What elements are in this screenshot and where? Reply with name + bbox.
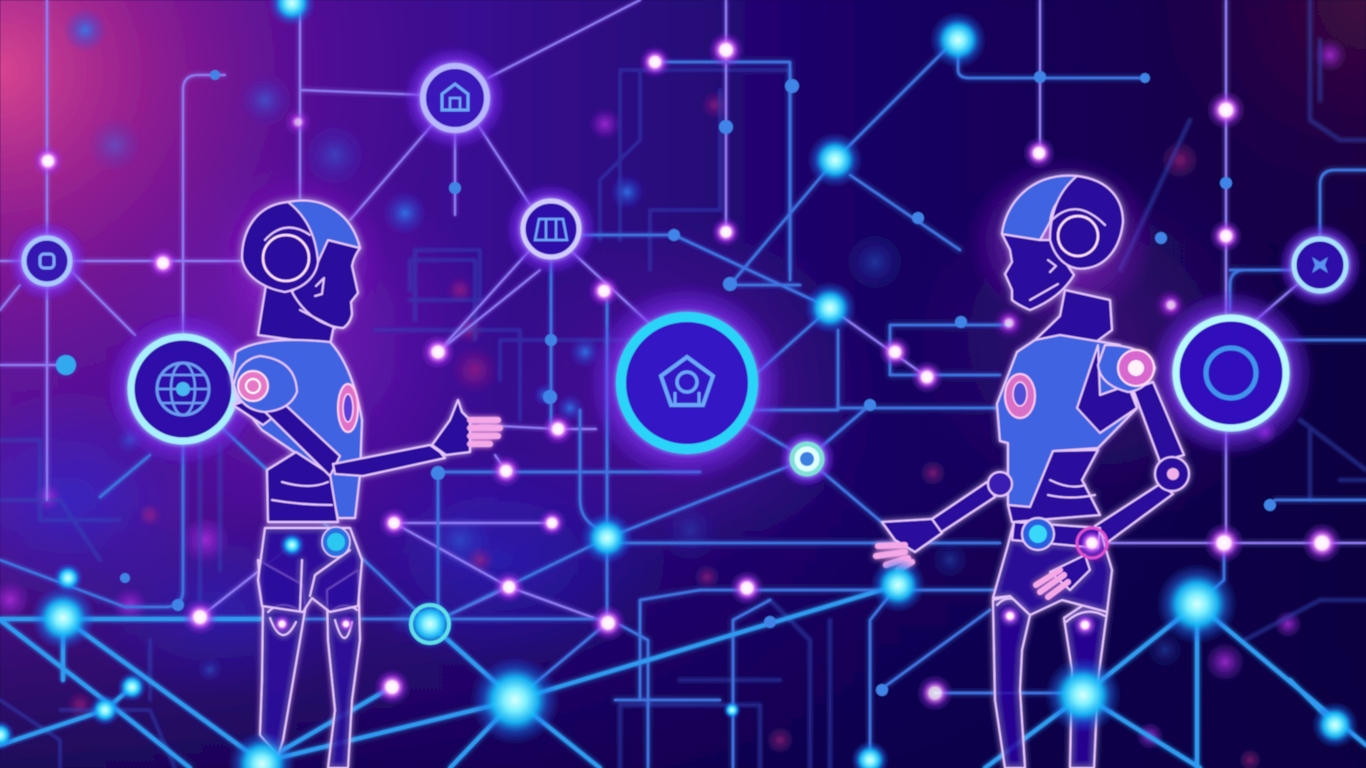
right robot head: [1002, 176, 1123, 310]
ring node: shield icon: [505, 183, 597, 275]
right robot torso: [997, 335, 1137, 522]
ring node: centre pentagon icon: [587, 283, 787, 483]
right robot: [876, 155, 1189, 768]
small blue junction dots: [120, 70, 1276, 696]
ring node: left small: [7, 221, 87, 301]
left robot legs: [258, 560, 360, 768]
right robot neck: [1033, 290, 1112, 350]
right robot back arm: [1095, 345, 1189, 542]
ring node: right small: [1278, 223, 1362, 307]
left robot arm: [234, 356, 445, 476]
left robot torso: [232, 340, 362, 522]
left robot hips and belt: [258, 527, 362, 633]
right robot legs: [993, 596, 1107, 768]
robot aura: [215, 175, 385, 345]
right robot wrist node and lower hand: [1036, 528, 1107, 597]
ring node: right large circle: [1147, 289, 1315, 457]
ring node: small cyan white: [779, 431, 835, 487]
left robot neck: [258, 280, 335, 345]
ring node: globe icon: [105, 311, 261, 467]
left robot hand: [432, 400, 500, 455]
left robot: [215, 175, 500, 768]
left robot head: [242, 201, 360, 328]
robot aura: [967, 155, 1157, 325]
thick cyan traces: [0, 585, 1366, 768]
right robot front arm: [876, 472, 1012, 570]
right robot hips: [993, 522, 1112, 615]
right robot belt: [1012, 518, 1100, 550]
ring node: top house icon: [403, 46, 507, 150]
